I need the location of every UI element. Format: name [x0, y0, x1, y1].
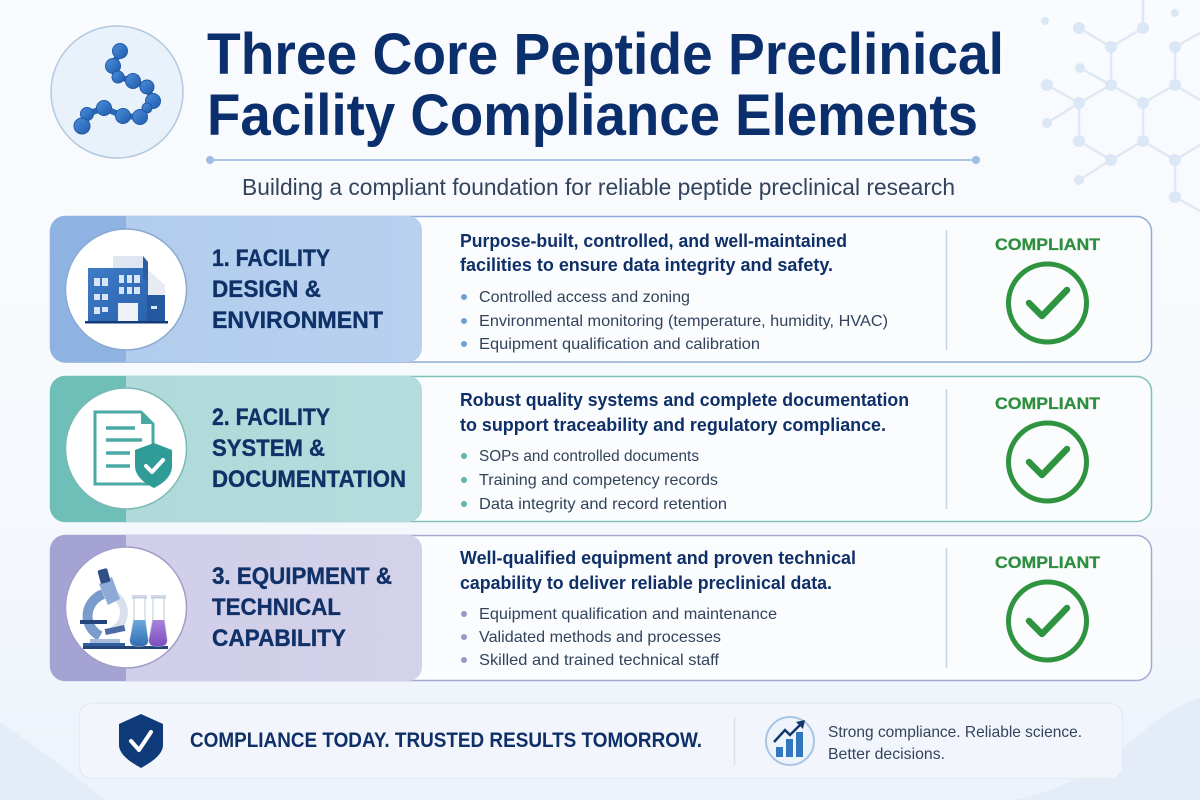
description 2: to support traceability and regulatory compliance. [460, 415, 886, 435]
icon: building [66, 229, 186, 350]
icon: shield check [119, 714, 163, 768]
heading 1 [212, 245, 383, 334]
bullet list 3: Validated methods and processes [479, 629, 721, 646]
title: Three Core Peptide Preclinical [207, 22, 1004, 87]
footer text: Better decisions. [828, 746, 945, 763]
description 2 [460, 390, 909, 435]
description 3 [460, 548, 856, 593]
decorative bottom waves [0, 698, 1200, 800]
description 2: Robust quality systems and complete documentation [460, 390, 909, 410]
icon: microscope and flasks [66, 547, 186, 668]
heading 3: CAPABILITY [212, 625, 346, 652]
description 3: capability to deliver reliable preclinical data. [460, 573, 832, 593]
heading 2: SYSTEM & [212, 435, 325, 462]
panel: footer banner [80, 704, 1122, 778]
description 1: Purpose-built, controlled, and well-maintained [460, 231, 847, 251]
title divider [206, 156, 980, 164]
heading 3: 3. EQUIPMENT & [212, 563, 392, 590]
icon: hexagon molecule pattern [1041, 0, 1200, 211]
heading 2: DOCUMENTATION [212, 466, 406, 493]
heading 1: ENVIRONMENT [212, 307, 383, 334]
description 3: Well-qualified equipment and proven technical [460, 548, 856, 568]
left banner 3 [50, 535, 422, 681]
panel: 2 facility system and documentation [50, 376, 1152, 522]
heading 2: 2. FACILITY [212, 404, 330, 431]
title [207, 22, 1004, 148]
icon: peptide chain [51, 26, 183, 158]
icon: growth chart [766, 717, 814, 765]
heading 3: TECHNICAL [212, 594, 341, 621]
title: Facility Compliance Elements [207, 83, 978, 148]
bullet list 3: Equipment qualification and maintenance [479, 606, 777, 623]
footer text: Strong compliance. Reliable science. [828, 724, 1082, 741]
bullet list 1: Environmental monitoring (temperature, humidity, HVAC) [479, 313, 888, 330]
left banner 1 [50, 216, 422, 362]
bullet list 2: SOPs and controlled documents [479, 448, 699, 465]
icon: document with shield [66, 388, 186, 509]
subtitle: Building a compliant foundation for reliable peptide preclinical research [242, 174, 955, 200]
status: compliant 3: COMPLIANT [995, 553, 1101, 572]
status: compliant 2 [995, 394, 1101, 501]
bullet list 2: Training and competency records [479, 472, 718, 489]
description 1: facilities to ensure data integrity and safety. [460, 255, 833, 275]
bullet list 3: Skilled and trained technical staff [479, 652, 720, 669]
panel: 3 equipment and technical capability [50, 535, 1152, 681]
heading 1: DESIGN & [212, 276, 321, 303]
heading 1: 1. FACILITY [212, 245, 330, 272]
status: compliant 3 [995, 553, 1101, 660]
bullet list 2 [461, 448, 727, 513]
footer slogan: COMPLIANCE TODAY. TRUSTED RESULTS TOMORROW. [190, 729, 702, 752]
bullet list 1: Equipment qualification and calibration [479, 336, 760, 353]
bullet list 1 [461, 289, 888, 353]
bullet list 2: Data integrity and record retention [479, 496, 727, 513]
footer text [828, 724, 1082, 763]
description 1 [460, 231, 847, 275]
bullet list 3 [461, 606, 777, 669]
bullet list 1: Controlled access and zoning [479, 289, 690, 306]
left banner 2 [50, 376, 422, 522]
panel: 1 facility design and environment [50, 216, 1152, 362]
status: compliant 2: COMPLIANT [995, 394, 1101, 413]
heading 2 [212, 404, 406, 493]
heading 3 [212, 563, 392, 652]
status: compliant 1: COMPLIANT [995, 235, 1101, 254]
status: compliant 1 [995, 235, 1101, 342]
